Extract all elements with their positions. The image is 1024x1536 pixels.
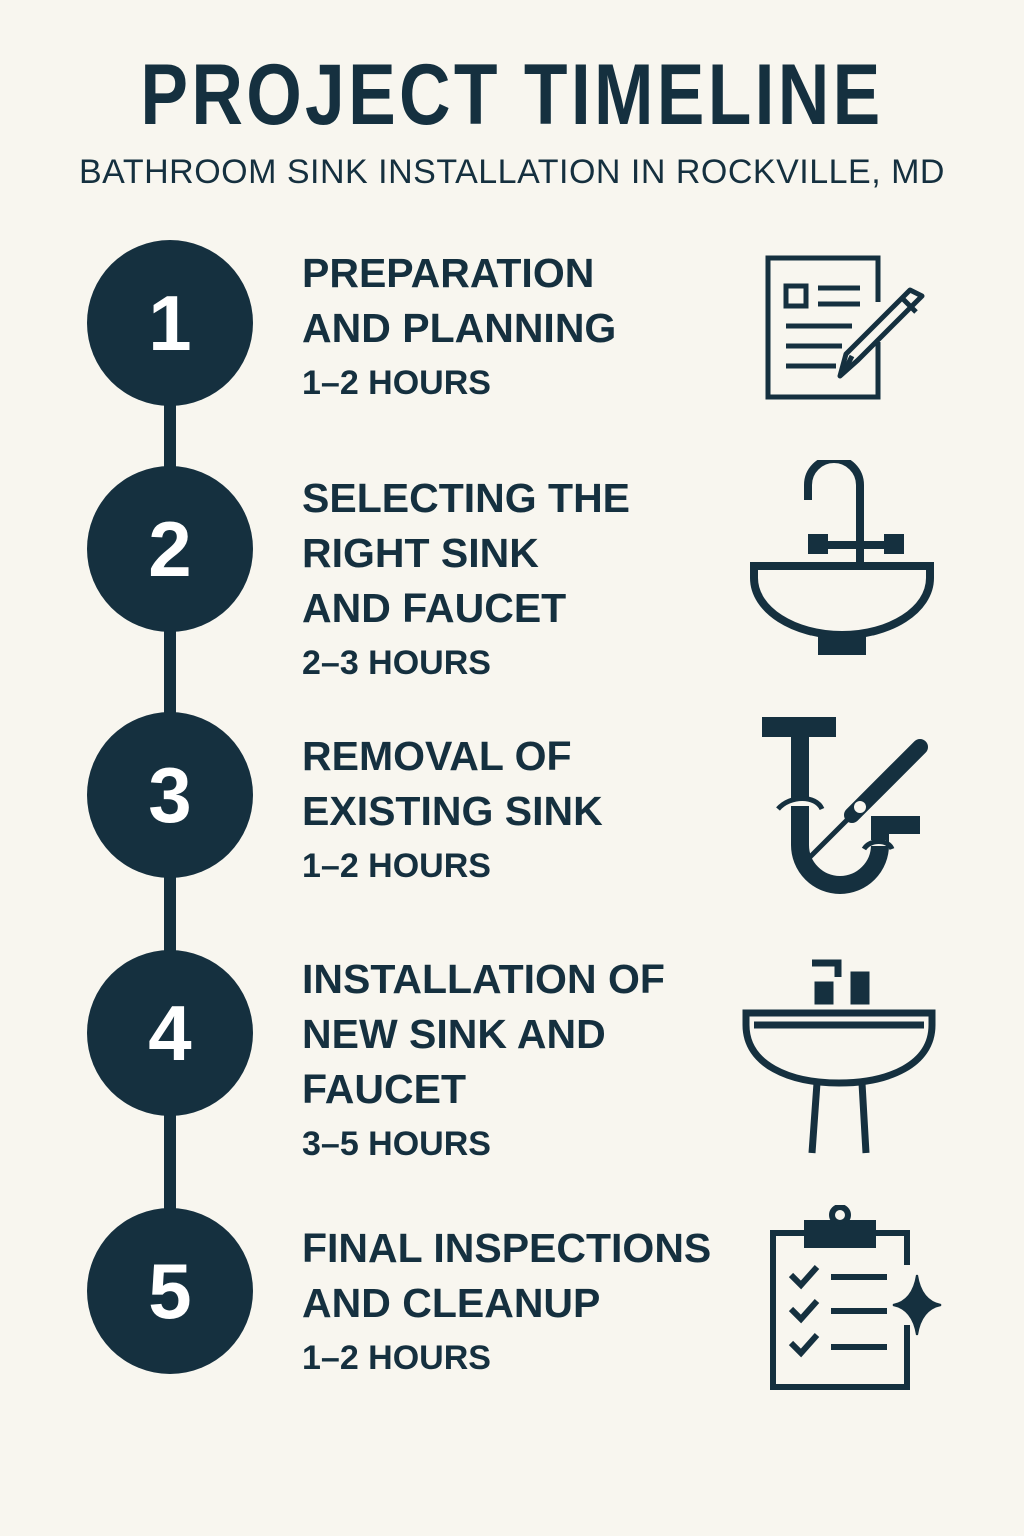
step 3 text bbox=[302, 733, 603, 885]
circle 5 bbox=[87, 1208, 253, 1374]
timeline line bbox=[164, 323, 176, 1291]
step 5 text: AND CLEANUP bbox=[302, 1280, 600, 1326]
step 2 text: AND FAUCET bbox=[302, 585, 566, 631]
circle 3: 3 bbox=[148, 751, 192, 839]
step 1 text bbox=[302, 250, 616, 402]
step 3 text: 1–2 HOURS bbox=[302, 847, 491, 885]
step 1 text: AND PLANNING bbox=[302, 305, 616, 351]
icon: clipboard checklist bbox=[770, 1205, 942, 1390]
step 3 text: EXISTING SINK bbox=[302, 788, 603, 834]
step 3 text: REMOVAL OF bbox=[302, 733, 572, 779]
circle 1 bbox=[87, 240, 253, 406]
circle 3 bbox=[87, 712, 253, 878]
circle 5: 5 bbox=[148, 1247, 192, 1335]
circle 2 bbox=[87, 466, 253, 632]
step 4 text: FAUCET bbox=[302, 1066, 466, 1112]
step 4 text bbox=[302, 956, 665, 1163]
circle 4 bbox=[87, 950, 253, 1116]
step 1 text: 1–2 HOURS bbox=[302, 364, 491, 402]
step 2 text: RIGHT SINK bbox=[302, 530, 539, 576]
step 5 text bbox=[302, 1225, 711, 1377]
step 4 text: 3–5 HOURS bbox=[302, 1125, 491, 1163]
step 2 text bbox=[302, 475, 630, 682]
circle 1: 1 bbox=[148, 279, 192, 367]
icon: sink with faucet bbox=[750, 460, 934, 655]
title: PROJECT TIMELINE bbox=[140, 47, 884, 143]
icon: sink on stand bbox=[742, 960, 936, 1154]
circle 4: 4 bbox=[148, 989, 192, 1077]
step 2 text: SELECTING THE bbox=[302, 475, 630, 521]
step 2 text: 2–3 HOURS bbox=[302, 644, 491, 682]
icon: document with pencil bbox=[766, 256, 924, 400]
step 5 text: FINAL INSPECTIONS bbox=[302, 1225, 711, 1271]
icon: pipe with wrench bbox=[762, 717, 928, 894]
circle 2: 2 bbox=[148, 505, 192, 593]
step 1 text: PREPARATION bbox=[302, 250, 594, 296]
step 4 text: NEW SINK AND bbox=[302, 1011, 606, 1057]
subtitle: BATHROOM SINK INSTALLATION IN ROCKVILLE, MD bbox=[79, 153, 945, 191]
step 4 text: INSTALLATION OF bbox=[302, 956, 665, 1002]
step 5 text: 1–2 HOURS bbox=[302, 1339, 491, 1377]
